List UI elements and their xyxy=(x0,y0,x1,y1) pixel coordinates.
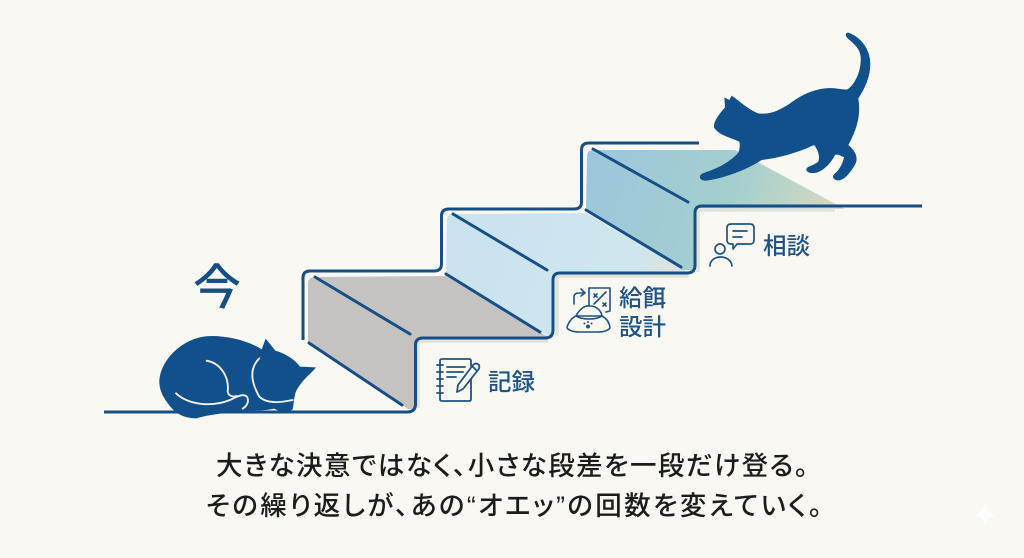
step 1 fill: grey xyxy=(308,276,549,409)
label: feeding plan: 設計 xyxy=(619,314,666,340)
fur lines xyxy=(176,358,293,409)
caption xyxy=(206,451,822,521)
label: feeding plan xyxy=(619,285,666,340)
cat: stretching on top step xyxy=(700,33,870,181)
label: now: 今 xyxy=(193,262,241,315)
caption: 大きな決意ではなく、小さな段差を一段だけ登る。 xyxy=(216,451,808,481)
label: feeding plan: 給餌 xyxy=(619,285,666,311)
label: record: 記録 xyxy=(488,369,536,395)
icon: sparkle xyxy=(973,503,997,527)
icon: person with speech bubble xyxy=(710,224,754,266)
icon: feeding bowl with plan xyxy=(567,288,610,332)
step 2 fill: pale blue xyxy=(446,213,690,336)
caption: その繰り返しが、あの“オエッ”の回数を変えていく。 xyxy=(206,491,822,521)
step 3 fill: blue to teal xyxy=(586,150,845,270)
soft shadow below lower line xyxy=(418,210,835,408)
lower stair line xyxy=(104,206,922,412)
cat: sleeping curled up xyxy=(159,336,316,418)
step edges xyxy=(309,149,688,405)
label: consult: 相談 xyxy=(763,233,810,259)
upper stair line xyxy=(303,143,699,340)
staircase xyxy=(104,143,922,412)
icon: notebook and pencil xyxy=(437,359,479,401)
